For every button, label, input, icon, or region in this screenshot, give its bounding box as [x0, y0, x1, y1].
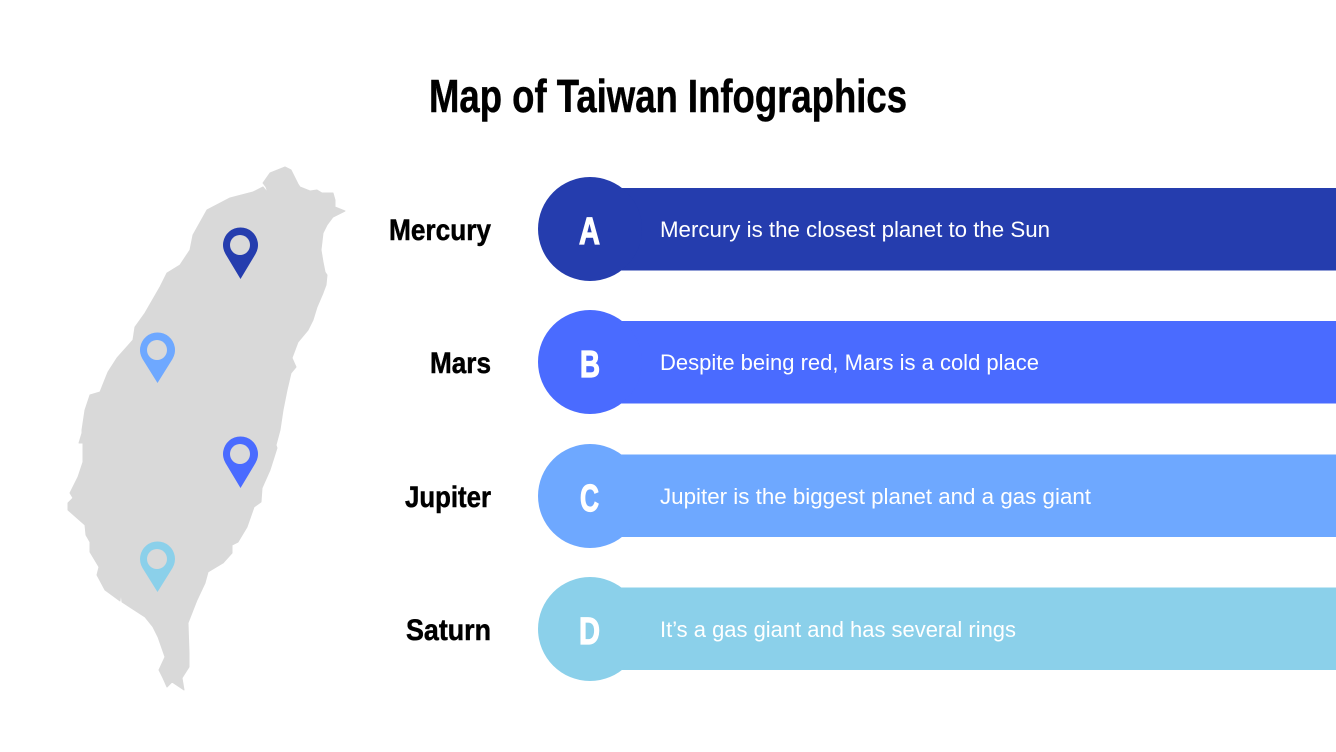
letter: B: B — [580, 344, 600, 386]
label: Jupiter: Jupiter — [405, 481, 491, 514]
letter: D: D — [579, 611, 600, 653]
bar: Saturn — [590, 588, 1336, 670]
letter: A: A — [579, 211, 600, 253]
label: Saturn: Saturn — [406, 614, 491, 647]
bar: Mercury — [590, 188, 1336, 270]
bar: Mars — [590, 321, 1336, 404]
badge: B — [538, 310, 642, 414]
badge: D — [538, 577, 642, 681]
title: Map of Taiwan Infographics — [429, 70, 907, 122]
row: Saturn — [406, 577, 1336, 681]
row: Mars — [430, 310, 1336, 414]
icon: pin D — [140, 541, 175, 592]
description: Mars: Despite being red, Mars is a cold place — [660, 350, 1039, 375]
description: Saturn: It’s a gas giant and has several rings — [660, 617, 1016, 642]
bar: Jupiter — [590, 454, 1336, 537]
description: Jupiter: Jupiter is the biggest planet and a gas giant — [660, 484, 1091, 509]
label: Mars: Mars — [430, 347, 491, 380]
icon: pin C — [140, 332, 175, 383]
icon: pin B — [223, 436, 258, 488]
description: Mercury: Mercury is the closest planet to the Sun — [660, 217, 1050, 242]
icon: pin A — [223, 227, 258, 279]
letter: C: C — [580, 478, 599, 520]
map of Taiwan with pins — [68, 167, 345, 690]
row: Jupiter — [405, 444, 1336, 548]
row: Mercury — [389, 177, 1336, 281]
badge: A — [538, 177, 642, 281]
map: Taiwan silhouette — [68, 167, 345, 690]
badge: C — [538, 444, 642, 548]
label: Mercury: Mercury — [389, 214, 491, 247]
